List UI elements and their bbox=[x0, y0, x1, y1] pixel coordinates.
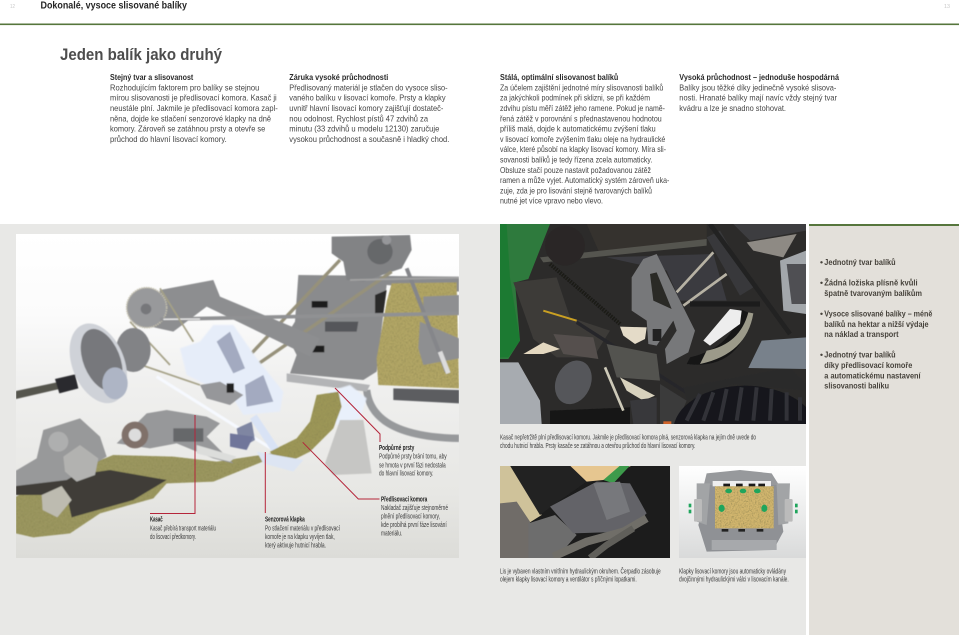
text block: Stálá, optimální slisovanost balíků: ramen a může vyjet. Automatický systém zároveň uka- bbox=[500, 175, 669, 185]
text block: Záruka vysoké průchodnosti: Předlisovaný materiál je stlačen do vysoce sliso- bbox=[289, 82, 448, 92]
benefit: pre-compression chamber: Jednotný tvar balíků bbox=[824, 350, 896, 360]
callout: Předlisovací komora: plnění předlisovací komory, bbox=[381, 512, 440, 520]
benefit: no mould: Žádná ložiska plísně kvůli bbox=[824, 277, 918, 288]
text block: Vysoká průchodnost bbox=[679, 72, 839, 113]
central lever bbox=[632, 254, 695, 364]
callout: Senzorová klapka: který aktivuje hutnicí hrabla. bbox=[265, 540, 326, 549]
leader line: Kasač bbox=[150, 415, 195, 514]
benefit: high density: Vysoce slisované balíky – méně bbox=[824, 309, 933, 319]
text block: Stálá, optimální slisovanost balíků: příliš malá, dojde k automatickému zvýšení tlaku bbox=[500, 124, 656, 134]
caption: chamber flaps: dvojčinnými hydraulickými válci v lisovacím kanále. bbox=[679, 575, 789, 584]
upper right panels bbox=[733, 224, 806, 241]
benefit: pre-compression chamber: díky předlisovací komoře bbox=[824, 360, 913, 370]
text block: Stejný tvar a slisovanost: komory. Zároveň se zatáhnou prsty a otevře se bbox=[110, 124, 266, 134]
text block: Stejný tvar a slisovanost: Stejný tvar a slisovanost bbox=[110, 72, 193, 82]
callout: Předlisovací komora: kde probíhá první fáze lisování bbox=[381, 520, 447, 529]
callout: Předlisovací komora: materiálu. bbox=[381, 528, 402, 537]
photo: hydraulic pump bbox=[500, 466, 670, 558]
text block: Stálá, optimální slisovanost balíků: Obsluze stačí pouze nastavit požadovanou zátěž bbox=[500, 165, 651, 175]
leader line: Předlisovací komora bbox=[303, 442, 380, 499]
callout: Předlisovací komora: Nakladač zajišťuje stejnoměrné bbox=[381, 503, 448, 512]
hay chute bbox=[270, 392, 342, 467]
tyre bbox=[673, 386, 817, 476]
text block: Stálá, optimální slisovanost balíků: řená zátěž v porovnání s přednastavenou hodnotou bbox=[500, 113, 662, 123]
callout: Kasač: Kasač přebírá transport materiálu bbox=[150, 523, 216, 532]
callout: Podpůrné prsty bbox=[379, 443, 447, 478]
left sprocket and chain bbox=[528, 284, 558, 314]
pick-up housing bbox=[16, 418, 107, 486]
benefit: high density: • bbox=[820, 309, 823, 319]
callout: Senzorová klapka: Po stlačení materiálu v předlisovací bbox=[265, 523, 340, 532]
text block: Stálá, optimální slisovanost balíků: nutné jet více vpravo nebo vlevo. bbox=[500, 196, 603, 206]
motor bbox=[555, 360, 592, 404]
piston rods bbox=[677, 252, 727, 306]
callout: Senzorová klapka: Senzorová klapka bbox=[265, 515, 305, 524]
caption: hydraulic pump: Lis je vybaven vlastním vnitřním hydraulickým okruhem. Čerpadlo zásobuje bbox=[500, 566, 661, 575]
lower-left panel bbox=[500, 362, 542, 424]
green bodywork bbox=[500, 224, 550, 359]
benefit: high density: na náklad a transport bbox=[824, 329, 899, 339]
text block: Stálá, optimální slisovanost balíků: zdvihu pístu měří zátěž jeho ramene. Pokud je namě- bbox=[500, 103, 665, 113]
caption: main photo: Kasač nepřetržitě plní předlisovací komoru. Jakmile je předlisovací komora plná, senzorová klapka na jejím dně uvede do bbox=[500, 433, 756, 442]
text block: Vysoká průchodnost: Vysoká průchodnost – jednoduše hospodárná bbox=[679, 72, 839, 82]
text block: Stálá, optimální slisovanost balíků: v lisovací komoře zvýšením tlaku oleje na hydraulické bbox=[500, 134, 666, 144]
text block: Záruka vysoké průchodnosti: vysokou průchodnost a současně i hladký chod. bbox=[289, 134, 449, 144]
caption: chamber flaps: Klapky lisovací komory jsou automaticky ovládány bbox=[679, 566, 786, 575]
callout: Kasač: Kasač bbox=[150, 515, 163, 524]
text block: Stejný tvar a slisovanost: neustále plní. Jakmile je předlisovací komora zapl- bbox=[110, 103, 278, 113]
text block: Stálá, optimální slisovanost balíků: válce, které působí na klapky lisovací komory. Míra sli- bbox=[500, 144, 666, 154]
benefit: pre-compression chamber bbox=[820, 350, 921, 391]
text block: Záruka vysoké průchodnosti: minutu (33 zdvihů u modelu 12130) zaručuje bbox=[289, 124, 440, 134]
callout: Senzorová klapka bbox=[265, 515, 340, 549]
text block: Vysoká průchodnost: nosti. Hranaté balíky mají navíc vždy stejný tvar bbox=[679, 93, 837, 103]
callout: Kasač bbox=[150, 515, 216, 541]
text block: Stálá, optimální slisovanost balíků bbox=[500, 72, 669, 206]
upper frame bbox=[587, 224, 707, 254]
benefit: high density bbox=[820, 309, 933, 339]
text block: Záruka vysoké průchodnosti: nou odolnost. Rychlost pístů 47 zdvihů za bbox=[289, 113, 428, 123]
panel: cutaway baler diagram bbox=[16, 234, 459, 558]
benefit: uniform shape: • bbox=[820, 257, 823, 267]
benefit: no mould: • bbox=[820, 278, 823, 288]
text block: Záruka vysoké průchodnosti bbox=[289, 72, 449, 144]
bale chamber bbox=[287, 275, 459, 380]
text block: Stálá, optimální slisovanost balíků: Stálá, optimální slisovanost balíků bbox=[500, 72, 618, 82]
caption: hydraulic pump: olejem klapky lisovací komory a ventilátor s příčnými lopatkami. bbox=[500, 575, 637, 584]
callout: Podpůrné prsty: do hlavní lisovací komory. bbox=[379, 469, 433, 478]
photo: bale chamber cross-section bbox=[679, 466, 806, 558]
header: section title: Dokonalé, vysoce slisované balíky bbox=[40, 0, 188, 11]
leader line: Senzorová klapka bbox=[264, 452, 266, 513]
header: page number right: 13 bbox=[944, 4, 950, 10]
header rule bbox=[0, 24, 959, 25]
text block: Vysoká průchodnost: Balíky jsou těžké díky jedinečně vysoké slisova- bbox=[679, 82, 836, 92]
text block: Záruka vysoké průchodnosti: uvnitř hlavní lisovací komory zajišťují dostateč- bbox=[289, 103, 444, 113]
text block: Vysoká průchodnost: kvádru a lze je snadno stohovat. bbox=[679, 103, 786, 113]
glowing pre-compression linkage bbox=[180, 325, 283, 415]
callout: Senzorová klapka: komoře je na klapku vyvíjen tlak, bbox=[265, 532, 335, 541]
benefit: pre-compression chamber: slisovanosti balíku bbox=[824, 381, 889, 391]
callout: Předlisovací komora bbox=[381, 494, 448, 537]
drum and white opening bbox=[687, 309, 752, 365]
pick-up belt bbox=[16, 470, 167, 517]
benefit: pre-compression chamber: a automatickému nastavení bbox=[824, 370, 921, 380]
callout: Kasač: do lisovací předkomory. bbox=[150, 532, 196, 541]
chain arm bbox=[152, 280, 316, 353]
callout: Podpůrné prsty: Podpůrné prsty brání tomu, aby bbox=[379, 452, 447, 461]
benefit: pre-compression chamber: • bbox=[820, 350, 823, 360]
text block: Stejný tvar a slisovanost bbox=[110, 72, 278, 144]
photo: baler side mechanism bbox=[500, 224, 806, 424]
panel: sidebar with benefits bbox=[809, 224, 959, 635]
callout: Předlisovací komora: Předlisovací komora bbox=[381, 494, 428, 504]
benefit: uniform shape: Jednotný tvar balíků bbox=[824, 257, 896, 267]
illustration: baler mechanism bbox=[16, 235, 459, 537]
pick-up swath of grass bbox=[16, 453, 272, 537]
text block: Záruka vysoké průchodnosti: Záruka vysoké průchodnosti bbox=[289, 72, 388, 82]
callout: Podpůrné prsty: Podpůrné prsty bbox=[379, 443, 414, 452]
leader line: Podpůrné prsty bbox=[335, 388, 380, 442]
caption: main photo bbox=[500, 433, 756, 450]
long diagonal bar bbox=[577, 322, 697, 399]
callout: Podpůrné prsty: se hmota v první fázi nedostala bbox=[379, 460, 446, 469]
feeder rotor and rake bbox=[117, 410, 233, 463]
benefit: no mould bbox=[820, 277, 922, 298]
flywheel and input shaft bbox=[116, 328, 151, 372]
header: page number left: 12 bbox=[10, 4, 15, 10]
benefit: high density: balíků na hektar a nižší výdaje bbox=[824, 319, 929, 329]
text block: Stejný tvar a slisovanost: něna, dojde ke stlačení senzorové klapky na dně bbox=[110, 113, 271, 123]
crank and top gear bbox=[332, 235, 412, 282]
lower body bbox=[607, 344, 660, 381]
caption: hydraulic pump bbox=[500, 566, 661, 584]
text block: Stálá, optimální slisovanost balíků: za jakýchkoli podmínek při sklizni, se při každém bbox=[500, 93, 650, 103]
text block: Stejný tvar a slisovanost: mírou slisovanosti je předlisovací komora. Kasač ji bbox=[110, 93, 277, 103]
text block: Stejný tvar a slisovanost: průchod do hlavní lisovací komory. bbox=[110, 134, 227, 144]
text block: Záruka vysoké průchodnosti: vaného balíku v lisovací komoře. Prsty a klapky bbox=[289, 93, 446, 103]
right support and steel curve bbox=[367, 390, 459, 438]
benefit: no mould: špatně tvarovaným balíkům bbox=[824, 288, 922, 298]
piston rods bbox=[250, 260, 392, 365]
text block: Stejný tvar a slisovanost: Rozhodujícím faktorem pro balíky se stejnou bbox=[110, 82, 260, 92]
text block: Stálá, optimální slisovanost balíků: sovanosti balíků je tedy řízena zcela automaticky. bbox=[500, 154, 652, 164]
caption: main photo: chodu hutnicí hrabla. Prsty kasače se zatáhnou a otevřou průchod do hlavní lisovací komory. bbox=[500, 441, 695, 450]
main heading: Jeden balík jako druhý bbox=[60, 45, 223, 64]
text block: Stálá, optimální slisovanost balíků: Za účelem zajištění jednotné míry slisovanosti balíků bbox=[500, 82, 664, 92]
caption: chamber flaps bbox=[679, 566, 789, 584]
text block: Stálá, optimální slisovanost balíků: zuje, zda je pro lisování stejně tvarovaných balíků bbox=[500, 185, 652, 195]
grey lower band bbox=[0, 224, 806, 635]
